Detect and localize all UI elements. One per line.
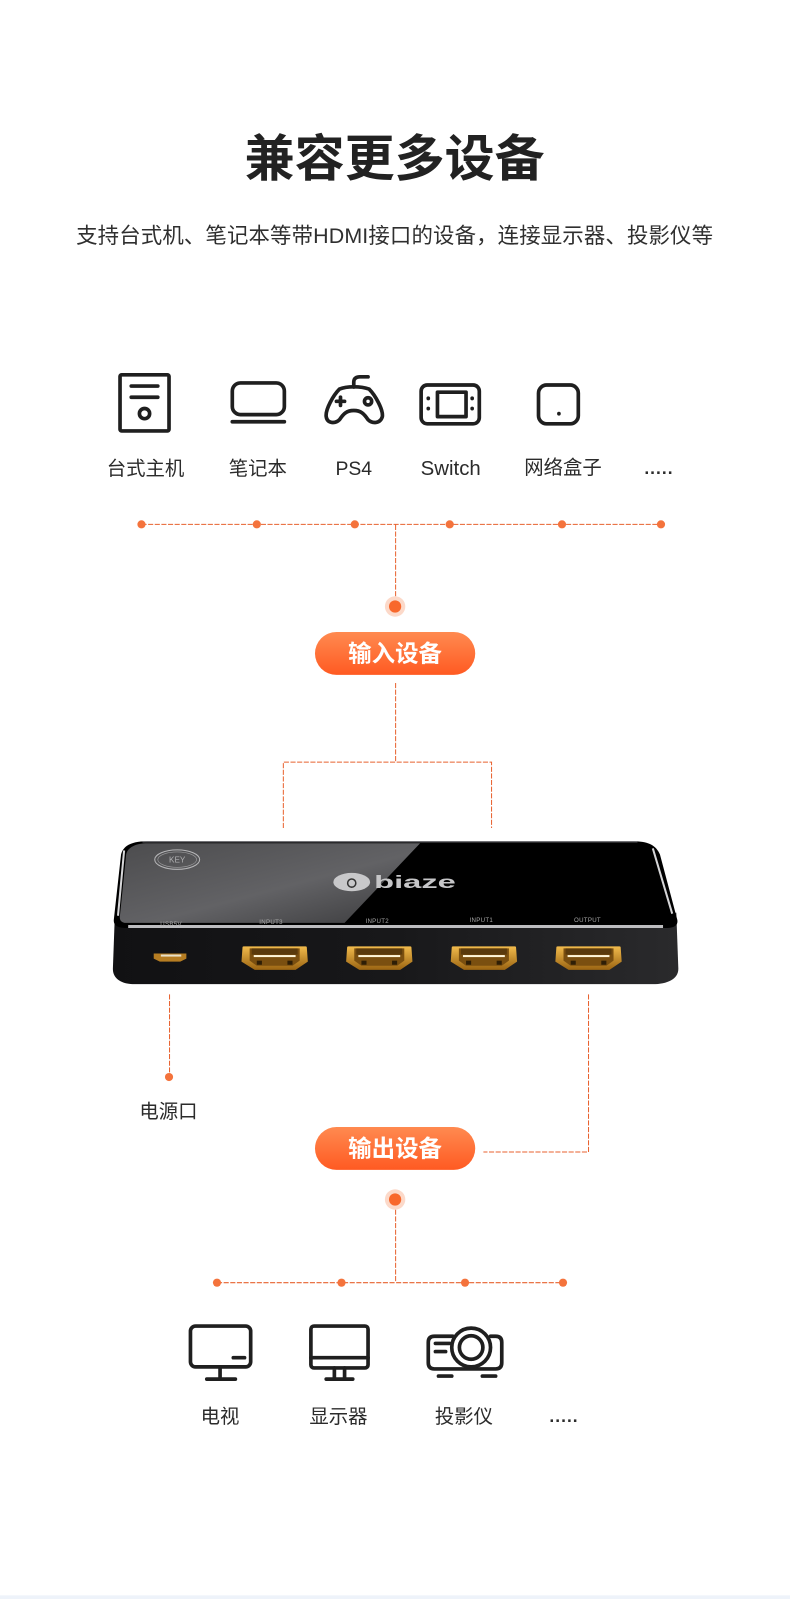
input device button: 输入设备 — [348, 641, 443, 667]
output device labels: 投影仪 — [435, 1406, 493, 1428]
HDMI output port — [555, 946, 622, 970]
device body — [113, 913, 678, 984]
port captions: INPUT2 — [365, 918, 389, 925]
output device labels — [201, 1406, 579, 1428]
input node dot — [385, 596, 405, 617]
title: 兼容更多设备 — [245, 131, 545, 187]
output device button: 输出设备 — [348, 1136, 443, 1162]
HDMI port 3 — [241, 946, 308, 970]
brand logo: biaze — [374, 872, 456, 892]
power connector line — [165, 994, 173, 1081]
input device labels: PS4 — [335, 458, 372, 480]
HDMI port 1 — [451, 946, 517, 970]
input device labels: ..... — [644, 458, 674, 478]
output device labels: 显示器 — [309, 1406, 368, 1428]
edge highlights — [118, 848, 672, 916]
output device labels: ..... — [549, 1406, 579, 1426]
output node dot — [385, 1189, 405, 1210]
output device button — [315, 1127, 475, 1170]
input device labels: 台式主机 — [107, 458, 184, 480]
icon: projector — [428, 1328, 502, 1376]
device: HDMI switch — [113, 841, 678, 984]
input device labels: 网络盒子 — [524, 457, 602, 479]
icon: desktop tower — [120, 375, 169, 431]
port captions: USB5V — [160, 921, 182, 928]
icon: network box — [539, 385, 578, 424]
output connector line — [483, 994, 589, 1152]
output connector lines — [213, 1210, 567, 1287]
bottom pale strip — [0, 1595, 790, 1599]
power port label: 电源口 — [139, 1101, 198, 1123]
icon: gamepad — [326, 377, 382, 422]
key button — [155, 850, 200, 869]
port captions — [160, 917, 601, 928]
port captions: OUTPUT — [574, 917, 601, 924]
subtitle: 支持台式机、笔记本等带HDMI接口的设备，连接显示器、投影仪等 — [76, 224, 713, 248]
input device labels: Switch — [421, 458, 481, 480]
icon: laptop — [232, 383, 284, 422]
input device labels — [107, 457, 674, 480]
main content — [76, 131, 713, 1428]
split lines to device inputs — [283, 683, 492, 828]
input device button — [315, 632, 475, 675]
input device labels: 笔记本 — [229, 458, 287, 480]
device top surface — [114, 841, 677, 928]
HDMI port 2 — [346, 946, 412, 970]
icon: monitor — [311, 1326, 368, 1379]
input connector lines — [137, 520, 665, 601]
icon: Switch console — [421, 385, 479, 424]
port captions: INPUT1 — [470, 917, 493, 924]
output device labels: 电视 — [201, 1406, 239, 1428]
port captions: INPUT3 — [259, 919, 283, 926]
glossy reflection — [120, 843, 420, 923]
brand logo — [333, 872, 456, 892]
micro USB port — [154, 954, 186, 962]
key button: KEY — [169, 856, 186, 865]
icon: TV — [190, 1326, 251, 1379]
